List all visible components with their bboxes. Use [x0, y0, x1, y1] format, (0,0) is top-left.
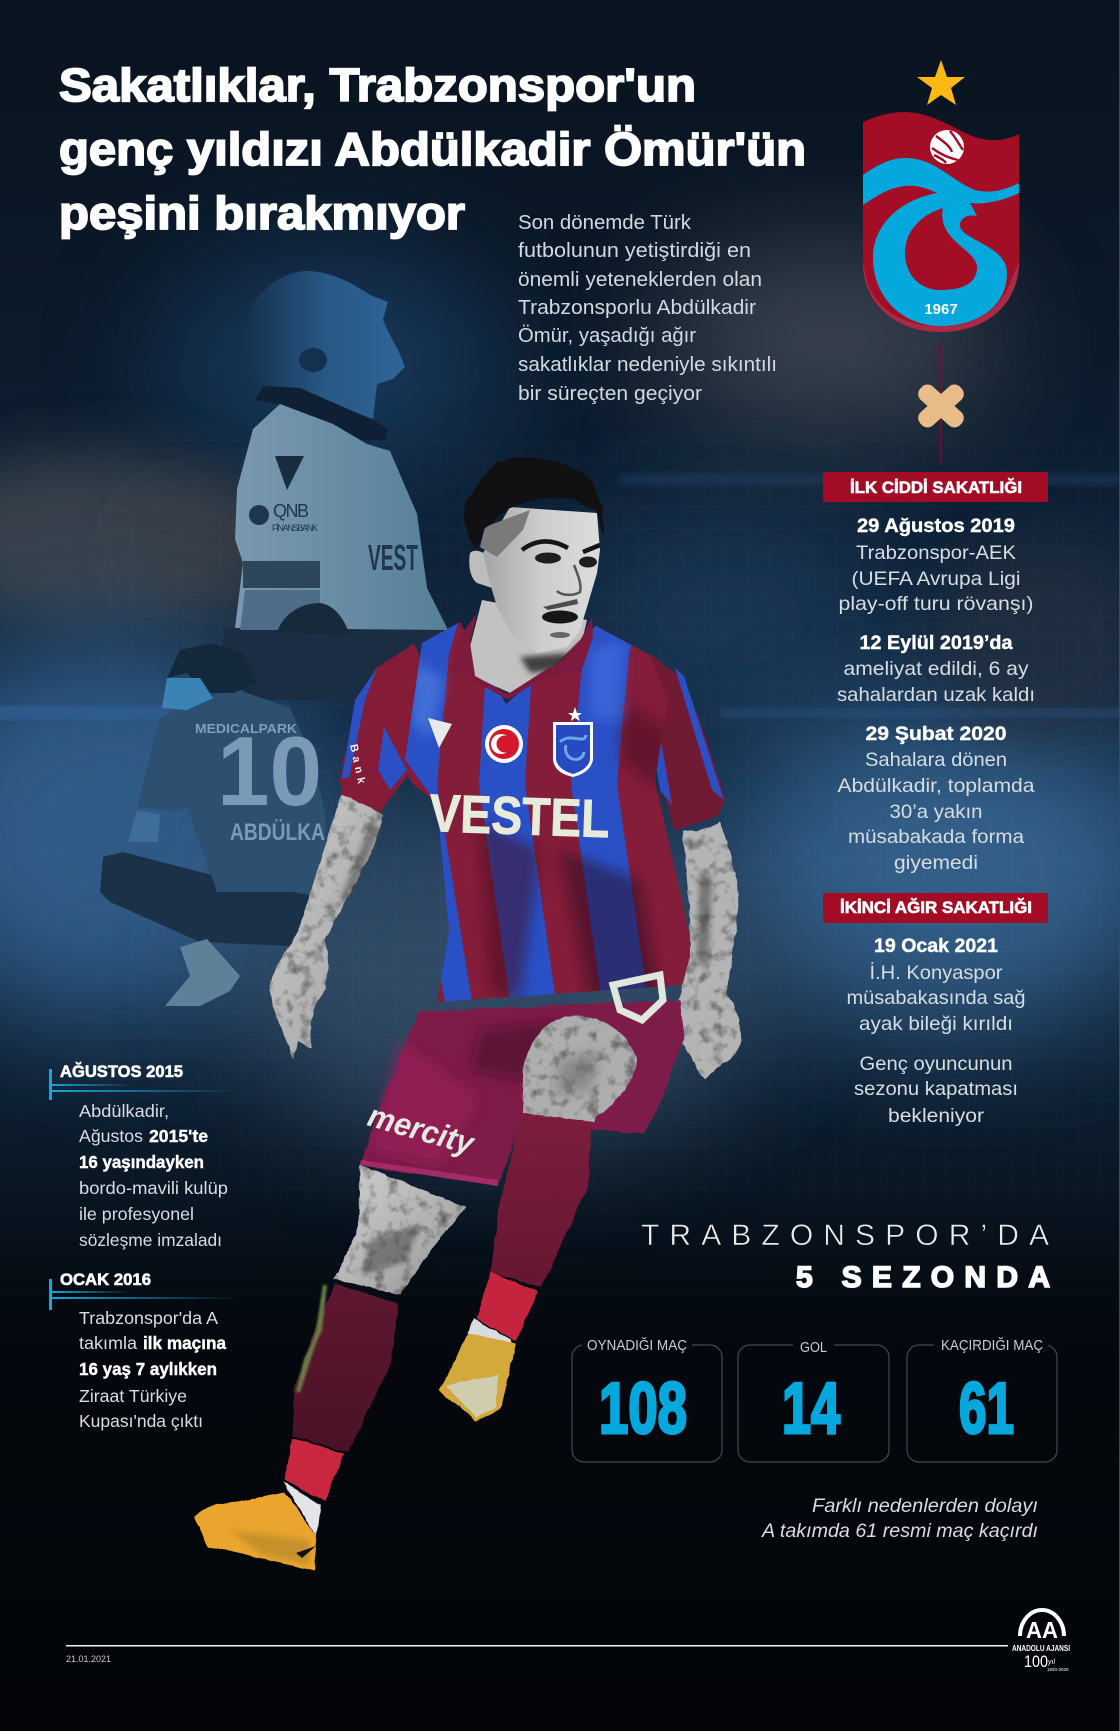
text: second injury details: Genç oyuncunun [860, 1053, 1012, 1075]
player left arm [270, 792, 384, 1059]
ghost player: kneeling [100, 643, 327, 1006]
stat box: goals: 14 [782, 1369, 840, 1449]
crest blue swirl [863, 158, 1019, 326]
title: Sakatlıklar, Trabzonspor'un [59, 59, 696, 111]
text: second injury details: ayak bileği kırıldı [859, 1013, 1013, 1035]
heading: OCAK 2016 [60, 1270, 151, 1289]
body text: takımla [79, 1333, 137, 1353]
player white cuff right [468, 1318, 512, 1352]
panel: August 2015 [49, 1062, 240, 1250]
chin shadow [520, 637, 583, 673]
kneeling hair [167, 643, 258, 693]
left sleeve piping [342, 668, 407, 790]
player legs and boots [194, 1000, 684, 1570]
body text: ile profesyonel [79, 1204, 194, 1224]
stat box: matches played: OYNADIĞI MAÇ [587, 1337, 687, 1354]
player hair [465, 457, 603, 547]
knee shading [555, 1050, 600, 1095]
shirt V trim [472, 670, 582, 697]
panel: January 2016 [49, 1270, 240, 1431]
intro text [518, 212, 777, 405]
ghost QNB sponsor [249, 501, 318, 533]
player right arm [673, 822, 740, 1080]
player boot right [439, 1333, 516, 1421]
kneeling legs [100, 852, 317, 946]
intro text: Trabzonsporlu Abdülkadir [518, 297, 756, 319]
player face [483, 507, 600, 653]
text: first injury details: 29 Şubat 2020 [866, 723, 1007, 745]
player brows [522, 541, 600, 552]
body text: Ağustos [79, 1126, 143, 1146]
icon: star [917, 60, 965, 105]
kneeling number: 10 [217, 716, 322, 826]
shirt blue stripes [403, 620, 648, 1002]
stat box: matches played: 108 [599, 1369, 687, 1449]
body text: bordo-mavili kulüp [79, 1178, 228, 1198]
shirt Turkish flag [485, 725, 523, 763]
kneeling face [162, 678, 213, 710]
player moustache [543, 599, 578, 610]
body text: Ziraat Türkiye [79, 1386, 187, 1406]
side hair [480, 510, 530, 557]
logo: Anadolu Ajansi: ANADOLU AJANSI [1012, 1643, 1070, 1653]
logo: Anadolu Ajansi: AA [1026, 1617, 1058, 1643]
icon: Trabzonspor crest [863, 112, 1019, 332]
banner: first injury: İLK CİDDİ SAKATLIĞI [850, 478, 1022, 497]
intro text: bir süreçten geçiyor [518, 383, 702, 405]
right sleeve stripes [650, 668, 724, 805]
ghost VESTEL text: VEST [368, 537, 418, 578]
text: first injury details: sahalardan uzak kaldı [837, 684, 1035, 706]
ghost QNB sponsor: QNB [273, 501, 309, 521]
body text: 16 yaş 7 aylıkken [79, 1359, 217, 1379]
crest year: 1967 [924, 301, 958, 318]
player white ankle left [284, 1482, 321, 1536]
grass stain [298, 1285, 325, 1392]
player mouth [542, 610, 578, 624]
title [59, 59, 806, 239]
ghost arm shadow [277, 603, 350, 636]
text: first injury details: ameliyat edildi, 6 ay [844, 658, 1029, 680]
text: first injury details: Abdülkadir, toplamda [838, 775, 1035, 797]
intro text: Ömür, yaşadığı ağır [518, 325, 696, 347]
text: first injury details: play-off turu rövanşı) [838, 593, 1034, 615]
text: first injury details: (UEFA Avrupa Ligi [852, 568, 1020, 590]
text: second injury details: müsabakasında sağ [846, 987, 1026, 1009]
player shirt right sleeve [650, 655, 726, 832]
stat box: matches missed: 61 [959, 1369, 1014, 1449]
logo: Anadolu Ajansi: 100 [1024, 1652, 1048, 1671]
ghost ear [299, 348, 327, 372]
banner: first injury [823, 472, 1048, 502]
intro text: Son dönemde Türk [518, 212, 692, 234]
text: second injury details: sezonu kapatması [854, 1078, 1018, 1100]
player upper right sock [491, 1113, 592, 1287]
player red ankle left [285, 1438, 344, 1501]
shirt Macron logo [428, 718, 452, 748]
kneeling arm [128, 810, 160, 842]
player lower lip shadow [550, 632, 570, 638]
player nose [557, 565, 581, 595]
stat box: matches played [572, 1337, 722, 1462]
heading: AĞUSTOS 2015 [60, 1062, 183, 1081]
ghost macron logo [275, 456, 304, 490]
text: first injury details: Sahalara dönen [865, 749, 1007, 771]
ghost collar [255, 386, 388, 441]
title: peşini bırakmıyor [59, 187, 465, 239]
kneeling surname: ABDÜLKA [230, 819, 325, 846]
shorts crest mark [613, 975, 663, 1020]
body text: ilk maçına [143, 1333, 226, 1353]
text: second injury details: 19 Ocak 2021 [874, 935, 998, 957]
shirt fold shading [410, 640, 670, 1000]
stat box: matches missed [907, 1337, 1057, 1462]
player neck [470, 600, 587, 693]
body text [79, 1308, 226, 1431]
player shorts [360, 1000, 684, 1186]
player boot left [194, 1492, 317, 1570]
stat note: A takımda 61 resmi maç kaçırdı [761, 1521, 1038, 1542]
shirt VESTEL sponsor: VESTEL [429, 784, 611, 849]
body text: Kupası'nda çıktı [79, 1411, 203, 1431]
text: first injury details: Trabzonspor-AEK [856, 542, 1016, 564]
ghost armband [243, 561, 320, 588]
stats heading: 5 SEZONDA [796, 1261, 1050, 1294]
text: first injury details: 12 Eylül 2019’da [860, 632, 1013, 654]
body text: Trabzonspor'da A [79, 1308, 218, 1328]
text: first injury details: 30’a yakın [890, 801, 982, 823]
text: first injury details [837, 515, 1035, 874]
logo: Anadolu Ajansi: 1920-2020 [1047, 1667, 1069, 1672]
heading marker [49, 1279, 240, 1310]
logo: Anadolu Ajansi [1012, 1610, 1070, 1672]
body text: 2015'te [149, 1126, 208, 1146]
body text [79, 1101, 228, 1250]
left sleeve sponsor: Bank [347, 743, 367, 786]
icon: plaster [915, 381, 967, 431]
limb shading [340, 820, 712, 1275]
shirt collar [450, 613, 593, 675]
body text: sözleşme imzaladı [79, 1230, 222, 1250]
text: second injury details [846, 935, 1026, 1127]
kneeling shoe [165, 939, 240, 1006]
player arms and thigh [270, 792, 740, 1295]
intro text: önemli yeteneklerden olan [518, 269, 762, 291]
stat box: matches missed: KAÇIRDIĞI MAÇ [941, 1337, 1043, 1354]
banner: second injury [823, 893, 1048, 923]
text: first injury details: müsabakada forma [848, 826, 1024, 848]
crest red interior [905, 208, 977, 290]
player eyes [535, 552, 597, 568]
kneeling back [137, 688, 327, 892]
title: genç yıldızı Abdülkadir Ömür'ün [59, 123, 806, 175]
shirt star [568, 707, 582, 721]
banner: second injury: İKİNCİ AĞIR SAKATLIĞI [840, 898, 1032, 917]
player ear [469, 551, 492, 588]
player red ankle right [476, 1272, 539, 1341]
shorts sponsor text: mercity [364, 1097, 480, 1162]
text: second injury details: bekleniyor [888, 1105, 985, 1127]
footer line [66, 1645, 1008, 1646]
connector line [940, 343, 942, 463]
player lower left sock [292, 1283, 398, 1452]
ghost shirt [235, 404, 448, 630]
body text: 16 yaşındayken [79, 1152, 204, 1172]
intro text: sakatlıklar nedeniyle sıkıntılı [518, 354, 777, 376]
stats heading: TRABZONSPOR’DA [641, 1219, 1049, 1252]
logo: Anadolu Ajansi: yıl [1047, 1659, 1055, 1666]
stat note [761, 1496, 1038, 1542]
ghost head [243, 271, 405, 419]
boot shade [230, 1530, 310, 1565]
shorts hem [360, 1160, 498, 1186]
stat box: goals [738, 1338, 889, 1462]
stats heading [641, 1219, 1050, 1294]
ghost QNB sponsor: FİNANSBANK [272, 523, 318, 533]
shirt crest [553, 722, 593, 777]
heading marker [49, 1069, 240, 1100]
text: second injury details: İ.H. Konyaspor [870, 961, 1003, 984]
ghost player: looking up [220, 271, 448, 700]
kneeling name text: MEDICALPARK [195, 721, 298, 736]
text: first injury details: 29 Ağustos 2019 [857, 515, 1015, 537]
shorts shading [370, 1020, 560, 1165]
boot swoosh [296, 1546, 316, 1558]
player bent knee [523, 1015, 637, 1122]
player shirt left sleeve [340, 643, 440, 812]
player left thigh [334, 1165, 466, 1295]
text: first injury details: giyemedi [894, 852, 978, 874]
stat box: goals: GOL [800, 1339, 827, 1356]
main player [194, 457, 740, 1570]
player shirt torso [405, 622, 690, 1002]
ghost dark lower body [220, 628, 448, 700]
body text: Abdülkadir, [79, 1101, 169, 1121]
ghost body shade [240, 590, 320, 630]
stat note: Farklı nedenlerden dolayı [812, 1496, 1038, 1517]
crest ball [930, 130, 964, 164]
intro text: futbolunun yetiştirdiği en [518, 240, 751, 262]
date: 21.01.2021 [66, 1654, 111, 1664]
